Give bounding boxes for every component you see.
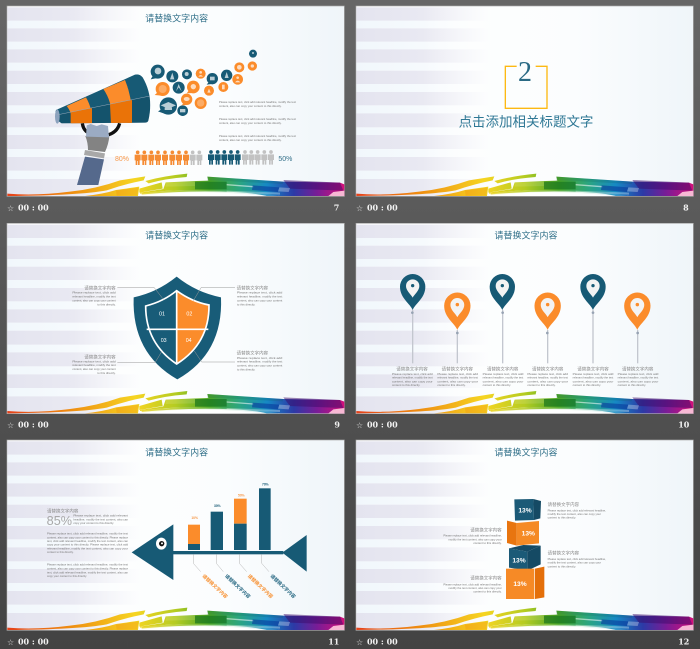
pin column 5 bbox=[573, 274, 614, 387]
callout: top right: content, also can copy your content bbox=[237, 298, 282, 302]
pin column 3: Please replace text, click add bbox=[483, 372, 524, 376]
callout: upper right bbox=[548, 501, 606, 520]
text block: 85% statistic: Please replace text, click add relevant bbox=[73, 514, 128, 518]
text block: paragraph 2: text, click add relevant headline, modify the text content, also can bbox=[47, 570, 128, 574]
pin column 1: Please replace text, click add bbox=[392, 372, 433, 376]
callout: bottom right: content, also can copy your content bbox=[237, 364, 282, 368]
text block: 85% statistic: 85% bbox=[47, 514, 72, 528]
callout: upper left: Please replace text, click add relevant headline, bbox=[443, 534, 502, 538]
icon: hand holding megaphone bbox=[77, 123, 120, 185]
pin column 4: 请替换文字内容 bbox=[532, 365, 564, 372]
footer: slide 12: 12 bbox=[678, 636, 689, 646]
text block: 85% statistic: copy your content to this directly. bbox=[73, 521, 114, 525]
text block: descriptions: Please replace text, click add relevant headline, modify the text bbox=[219, 134, 296, 138]
footer: slide 7 bbox=[7, 202, 339, 213]
panel: slide 10 map pins bbox=[356, 223, 693, 430]
fish bone connectors bbox=[193, 554, 269, 572]
pin column 2 bbox=[437, 292, 478, 387]
panel: slide 12 stacked cubes bbox=[356, 440, 693, 647]
label: rotated captions: 请替换文字内容 bbox=[246, 573, 275, 600]
text block: paragraph 2: Please replace text, click add relevant headline, modify the text bbox=[47, 563, 128, 567]
chart: 80% people pictogram: 80% bbox=[115, 156, 129, 163]
callout: upper left bbox=[443, 527, 502, 545]
pin column 4: content to this directly. bbox=[527, 383, 556, 387]
icon: stacked cubes: 13% bbox=[513, 581, 527, 588]
icons: speech bubble cluster bbox=[151, 50, 257, 116]
callout: upper left: 请替换文字内容 bbox=[470, 527, 502, 534]
pin column 5: content to this directly. bbox=[573, 383, 601, 387]
footer: slide 7: ☆ bbox=[7, 204, 14, 213]
section number: 2 bbox=[518, 57, 532, 88]
text block: paragraph 1: copy your content to this directly. Please replace text, click add bbox=[47, 543, 128, 547]
callout: top left: content, also can copy your content bbox=[72, 298, 116, 302]
text block: paragraph 1: text, click add relevant headline, modify the text content, also can bbox=[47, 539, 128, 543]
footer: slide 10: 10 bbox=[678, 419, 690, 429]
footer: slide 12: 00 : 00 bbox=[367, 636, 398, 646]
callout: lower right: modify the text content, also can copy your bbox=[548, 561, 601, 565]
pin column 4: relevant headline, modify the text bbox=[527, 376, 568, 380]
pin column 6 bbox=[618, 292, 659, 387]
text block: 85% statistic bbox=[47, 508, 128, 528]
callout: lower left: modify the text content, also can copy your bbox=[448, 586, 502, 590]
bar chart bbox=[188, 482, 271, 550]
footer: slide 11 bbox=[7, 636, 339, 647]
footer: slide 10: 00 : 00 bbox=[367, 419, 398, 429]
text block: descriptions: Please replace text, click add relevant headline, modify the text bbox=[219, 100, 296, 104]
pin column 1: content, also can copy your bbox=[392, 379, 433, 383]
callout: bottom left bbox=[72, 352, 162, 375]
pin column 1: relevant headline, modify the text bbox=[392, 376, 433, 380]
chart: 50% people pictogram: 50% bbox=[278, 156, 292, 163]
callout: top left: to this directly. bbox=[97, 302, 116, 306]
text block: paragraph 2: copy your content to this directly. bbox=[47, 574, 87, 578]
text block: 85% statistic: headline, modify the text content, also can bbox=[73, 517, 128, 521]
callout: bottom right bbox=[194, 349, 283, 372]
bar chart: 30% bbox=[214, 504, 221, 508]
footer: slide 7: 00 : 00 bbox=[18, 202, 49, 212]
title: 请替换文字内容 bbox=[145, 13, 208, 24]
pin column 1 bbox=[392, 274, 433, 387]
panel: slide 9 shield bbox=[7, 223, 344, 430]
callout: bottom left: Please replace text, click add bbox=[72, 359, 116, 363]
callout: lower right: content to this directly. bbox=[548, 564, 576, 568]
callout: upper left: modify the text content, also can copy your bbox=[448, 537, 502, 541]
callout: bottom left: 请替换文字内容 bbox=[84, 353, 116, 360]
text block: paragraph 2: content, also can copy your content to this directly. Please replace bbox=[47, 566, 128, 570]
chart: 80% people pictogram bbox=[115, 150, 202, 165]
callout: top left: 请替换文字内容 bbox=[84, 284, 116, 291]
footer: slide 12: ☆ bbox=[356, 638, 363, 647]
callout: bottom left: relevant headline, modify the text bbox=[72, 363, 116, 367]
pin column 4: Please replace text, click add bbox=[527, 372, 568, 376]
icon: yellow bracket frame bbox=[505, 66, 547, 108]
pin column 2: Please replace text, click add bbox=[437, 372, 478, 376]
callout: lower left: 请替换文字内容 bbox=[470, 575, 502, 582]
callout: top right bbox=[193, 284, 283, 306]
icon: stacked cubes bbox=[506, 499, 544, 599]
pin column 5: Please replace text, click add bbox=[573, 372, 614, 376]
callout: upper left: content to this directly. bbox=[473, 541, 502, 545]
bar chart: 70% bbox=[262, 482, 269, 486]
panel: slide 11 fishbone bbox=[7, 440, 344, 647]
title: 请替换文字内容 bbox=[145, 230, 208, 241]
icon: shield with four quadrants: 04 bbox=[186, 338, 192, 344]
callout: upper right: content to this directly. bbox=[548, 516, 576, 520]
pin column 1: 请替换文字内容 bbox=[396, 365, 428, 372]
callout: bottom left: to this directly. bbox=[97, 371, 116, 375]
pin column 2: relevant headline, modify the text bbox=[437, 376, 478, 380]
footer: slide 9: 00 : 00 bbox=[18, 419, 49, 429]
callout: bottom right: to this directly. bbox=[237, 368, 255, 372]
footer: slide 9: ☆ bbox=[7, 421, 14, 430]
pin column 4 bbox=[527, 292, 568, 387]
callout: bottom right: relevant headline, modify the text bbox=[237, 360, 283, 364]
text block: paragraph 1 bbox=[47, 532, 128, 554]
footer: slide 12 bbox=[356, 636, 689, 647]
footer: slide 9 bbox=[7, 419, 340, 430]
callout: lower right bbox=[548, 549, 606, 568]
title: 请替换文字内容 bbox=[495, 447, 557, 458]
pin column 2: content to this directly. bbox=[437, 383, 466, 387]
callout: lower left: content to this directly. bbox=[473, 590, 502, 594]
icon: fish eye bbox=[156, 538, 167, 550]
chart: 50% people pictogram bbox=[208, 150, 292, 165]
footer: slide 8: ☆ bbox=[356, 204, 363, 213]
text block: descriptions: content, also can copy your content to this directly. bbox=[219, 138, 282, 142]
pin column 6: content to this directly. bbox=[618, 383, 646, 387]
footer: slide 11: ☆ bbox=[7, 638, 14, 647]
chart: fish skeleton bbox=[132, 524, 307, 580]
callout: bottom left: content, also can copy your content bbox=[72, 367, 116, 371]
icon: stacked cubes: 13% bbox=[522, 531, 535, 538]
callout: lower left: Please replace text, click add relevant headline, bbox=[443, 582, 502, 586]
callout: top right: relevant headline, modify the text bbox=[237, 294, 283, 298]
text block: paragraph 2 bbox=[47, 563, 128, 578]
footer: slide 10: ☆ bbox=[356, 421, 363, 430]
text block: paragraph 1: content to this directly. bbox=[47, 550, 74, 554]
panel: slide 8 section title bbox=[356, 6, 693, 213]
pin column 5: relevant headline, modify the text bbox=[573, 376, 613, 380]
footer: slide 8: 00 : 00 bbox=[367, 202, 398, 212]
pin column 5: content, also can copy your bbox=[573, 379, 613, 383]
icon: megaphone bbox=[55, 74, 150, 124]
pin column 3: content to this directly. bbox=[483, 383, 511, 387]
panel: slide 7 megaphone bbox=[7, 6, 344, 213]
pin column 2: content, also can copy your bbox=[437, 379, 478, 383]
callout: top right: 请替换文字内容 bbox=[237, 284, 269, 291]
footer: slide 9: 9 bbox=[334, 419, 340, 429]
callout: top right: to this directly. bbox=[237, 302, 255, 306]
text block: descriptions: content, also can copy your content to this directly. bbox=[219, 104, 282, 108]
icon: stacked cubes: 13% bbox=[518, 507, 532, 514]
label: rotated captions: 请替换文字内容 bbox=[269, 573, 297, 600]
callout: top right: Please replace text, click add bbox=[237, 291, 283, 295]
pin column 3 bbox=[483, 274, 524, 387]
callout: top left: Please replace text, click add bbox=[72, 291, 116, 295]
pin column 3: 请替换文字内容 bbox=[487, 365, 519, 372]
text block: descriptions: content, also can copy your content to this directly. bbox=[219, 121, 282, 125]
callout: lower left bbox=[443, 575, 502, 594]
callout: bottom right: Please replace text, click add bbox=[237, 356, 283, 360]
footer: slide 8 bbox=[356, 202, 689, 213]
pin column 4: content, also can copy your bbox=[527, 379, 568, 383]
pin column 6: 请替换文字内容 bbox=[622, 365, 654, 372]
footer: slide 10 bbox=[356, 419, 690, 430]
label: rotated captions: 请替换文字内容 bbox=[201, 573, 229, 600]
text block: 85% statistic: 请替换文字内容 bbox=[47, 508, 79, 515]
text block: descriptions: Please replace text, click add relevant headline, modify the text bbox=[219, 117, 296, 121]
callout: lower right: 请替换文字内容 bbox=[548, 549, 580, 556]
text block: paragraph 1: Please replace text, click add relevant headline, modify the text bbox=[47, 532, 128, 536]
footer: slide 11: 00 : 00 bbox=[18, 636, 49, 646]
bar chart: 50% bbox=[238, 494, 245, 498]
icon: shield with four quadrants: 02 bbox=[186, 312, 192, 318]
callout: lower right: Please replace text, click add relevant headline, bbox=[548, 557, 606, 561]
text block: paragraph 1: relevant headline, modify the text content, also can copy your bbox=[47, 546, 128, 550]
footer: slide 7: 7 bbox=[334, 202, 339, 212]
callout: bottom right: 请替换文字内容 bbox=[237, 349, 269, 356]
pin column 6: content, also can copy your bbox=[618, 379, 658, 383]
callout: upper right: modify the text content, also can copy your bbox=[548, 512, 601, 516]
callout: upper right: Please replace text, click add relevant headline, bbox=[548, 508, 606, 512]
pin column 3: relevant headline, modify the text bbox=[483, 376, 523, 380]
pin column 2: 请替换文字内容 bbox=[442, 365, 474, 372]
text block: descriptions bbox=[219, 100, 296, 142]
callout: top left: relevant headline, modify the text bbox=[72, 294, 116, 298]
text block: paragraph 1: content, also can copy your content to this directly. Please replace bbox=[47, 535, 128, 539]
icon: shield with four quadrants: 03 bbox=[161, 338, 167, 344]
pin column 6: Please replace text, click add bbox=[618, 372, 659, 376]
icon: shield with four quadrants bbox=[134, 277, 221, 379]
label: rotated captions: 请替换文字内容 bbox=[223, 573, 252, 600]
pin column 3: content, also can copy your bbox=[483, 379, 523, 383]
bar chart: 10% bbox=[191, 516, 198, 520]
pin column 6: relevant headline, modify the text bbox=[618, 376, 658, 380]
pin column 5: 请替换文字内容 bbox=[577, 365, 609, 372]
icon: stacked cubes: 13% bbox=[512, 558, 526, 565]
icon: shield with four quadrants: 01 bbox=[159, 312, 165, 318]
label: rotated captions bbox=[201, 573, 297, 600]
callout: top left bbox=[72, 284, 163, 306]
pin column 1: content to this directly. bbox=[392, 383, 420, 387]
title: 请替换文字内容 bbox=[145, 447, 208, 458]
footer: slide 8: 8 bbox=[683, 202, 689, 212]
title: 请替换文字内容 bbox=[495, 230, 557, 241]
footer: slide 11: 11 bbox=[328, 636, 339, 646]
callout: upper right: 请替换文字内容 bbox=[548, 501, 580, 508]
heading: 点击添加相关标题文字 bbox=[459, 114, 593, 129]
